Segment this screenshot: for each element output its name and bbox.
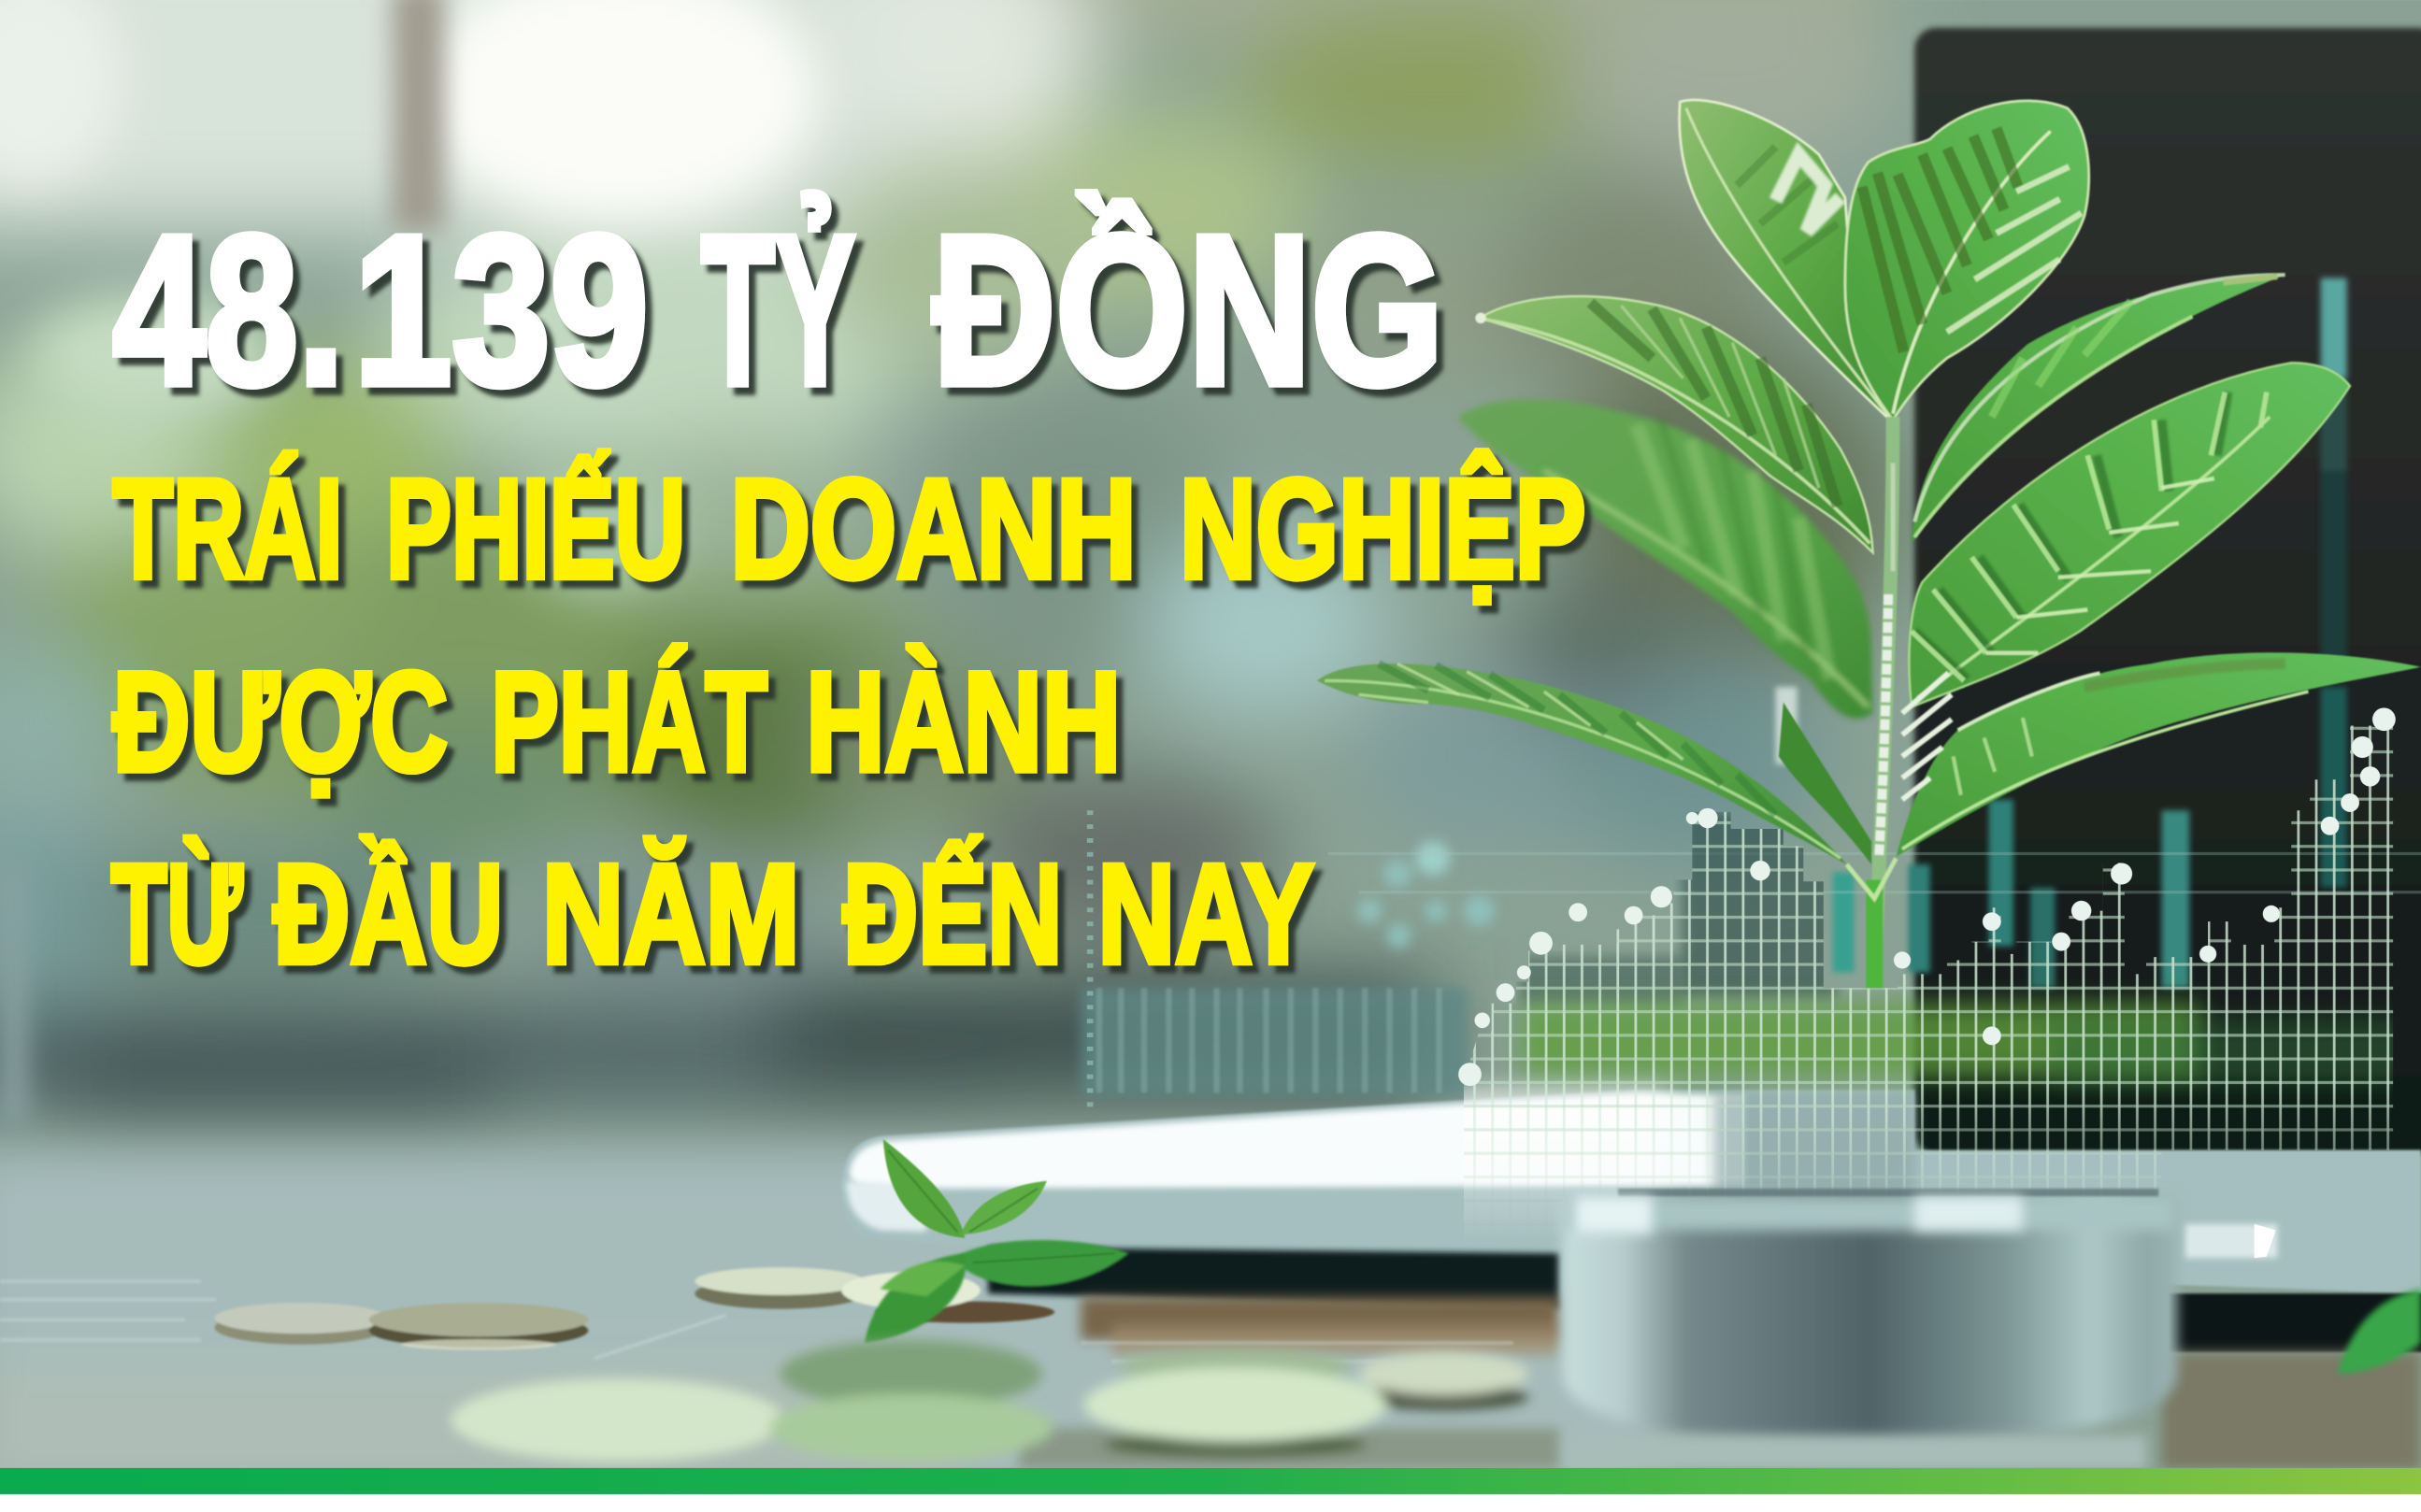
subtitle line 2: ĐƯỢC <box>113 643 448 801</box>
blurred right leaf <box>2338 1289 2421 1374</box>
small sprout and coins <box>215 1139 2421 1462</box>
subtitle line 1: DOANH <box>730 450 1137 608</box>
data chart: grid <box>1464 725 2393 1222</box>
subtitle line 1: NGHIỆP <box>1180 450 1585 608</box>
subtitle line 2 <box>113 643 1121 801</box>
subtitle line 3: NAY <box>1097 835 1314 993</box>
laptop <box>841 1090 2421 1293</box>
subtitle line 2: HÀNH <box>806 643 1121 801</box>
title: amount: ĐỒNG <box>933 192 1443 430</box>
subtitle line 3: ĐẾN <box>843 835 1062 993</box>
stem <box>1847 417 1952 988</box>
leaf: upper right narrow <box>1912 275 2285 543</box>
dark screen panel <box>1776 28 2421 1155</box>
subtitle line 3 <box>111 835 1314 993</box>
plant <box>1317 100 2421 988</box>
table streaks <box>0 1281 1513 1362</box>
subtitle line 1 <box>113 450 1585 608</box>
chart: teal bars <box>1776 278 2347 988</box>
title: amount: 139 <box>353 193 649 430</box>
coin stack: centre <box>695 1267 1054 1323</box>
coin stack: left <box>215 1303 588 1350</box>
leaf: lower left <box>1317 663 1847 864</box>
title: amount: 48. <box>113 193 344 430</box>
blurred chart on the left <box>1081 810 2421 1111</box>
leaf: top right <box>1845 101 2089 420</box>
sprout leaves <box>865 1139 1128 1343</box>
leaf: top left <box>1680 100 1890 420</box>
subtitle line 3: NĂM <box>542 835 800 993</box>
blurred foreground coins <box>451 1340 1528 1462</box>
subtitle line 3: ĐẦU <box>273 835 503 993</box>
subtitle line 1: TRÁI <box>113 450 343 608</box>
leaf: second left <box>1475 296 1873 552</box>
white bottom margin <box>0 1494 2421 1512</box>
wooden table and laptop shadow <box>988 1248 2421 1470</box>
chart: data points <box>1458 707 2396 1086</box>
subtitle line 1: PHIẾU <box>386 450 685 608</box>
subtitle line 3: TỪ <box>111 835 243 993</box>
bottom green bar <box>0 1468 2421 1494</box>
leaf: third left (blurred) <box>1457 399 1873 719</box>
leaf: small centre <box>1779 703 1871 864</box>
title: amount: TỶ <box>701 193 855 430</box>
leaf: big right <box>1909 363 2350 707</box>
leaf: lower right <box>1896 652 2421 857</box>
headline <box>111 192 1585 993</box>
metal pot <box>1563 1189 2177 1470</box>
title: amount <box>113 192 1443 430</box>
subtitle line 2: PHÁT <box>491 643 767 801</box>
